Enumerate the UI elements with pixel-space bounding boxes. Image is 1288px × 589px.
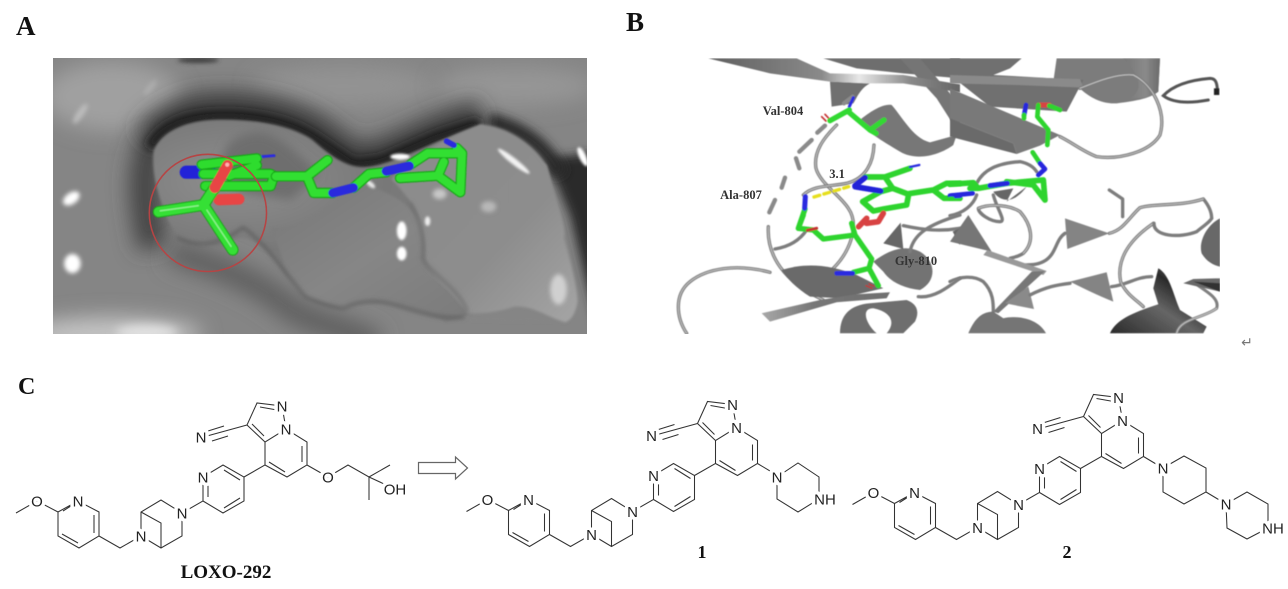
structure: compound 2: N [1158,460,1168,478]
structure: compound 2 [852,390,1284,540]
panel label A: A [16,11,36,41]
red circle highlighting tert-butyl alcohol group [149,154,267,272]
left ribbon section [678,58,960,333]
structure: compound 1: N [772,470,782,486]
structure: compound 1: N [523,492,534,509]
shadow along left wall [145,138,157,248]
compound label 2: 2 [1062,542,1072,562]
structure: compound 2: N [972,520,983,537]
specular highlights [61,79,590,340]
panel A: surface view of binding pocket [53,58,587,334]
mid lobe of surface [306,194,463,314]
structure: LOXO-292: N [281,422,291,438]
structure: compound 1: N [648,468,659,485]
structure: compound 1: NH [814,492,836,508]
hydrogen bond dashes [814,187,849,197]
dark core of ceiling shadow [150,116,481,165]
panel label B: B [626,7,644,37]
surface shading [22,57,602,352]
residue label Ala-807: Ala-807 [720,188,762,202]
arrow: hollow reaction arrow [418,457,468,479]
structure: compound 2: O [868,485,879,502]
right lobe of surface [391,125,578,322]
dashed backbone segments [769,97,853,212]
ligand sticks [159,141,462,250]
structure: LOXO-292: N [177,506,187,522]
distance label 3.1: 3.1 [829,167,845,181]
structure: compound 1: N [627,504,638,521]
structure: compound 2: NH [1262,520,1284,538]
structure: compound 1: N [731,420,742,437]
compound name LOXO-292: LOXO-292 [181,562,271,583]
crevice shadow lines [178,203,467,318]
structure: compound 2: N [1034,461,1045,478]
structure: compound 2: N [1117,413,1128,430]
structure: LOXO-292: OH [384,482,406,498]
panel B: ribbon view of ligand in kinase [678,58,1220,333]
structure: compound 1: N [727,397,738,414]
lower slope shading [171,252,378,345]
return mark glyph: ↵ [1241,335,1253,351]
structure: compound 2: N [1221,496,1231,514]
structure: compound 2: N [1113,390,1124,407]
right ribbon section [950,58,1220,333]
compound label 1: 1 [698,542,706,562]
inner ridge of pocket [222,132,312,200]
pocket interior [152,118,550,260]
structure: compound 2: N [909,485,920,502]
right ligand sticks [950,105,1060,200]
structure: compound 1: N [646,428,657,445]
broad shadow under ceiling [147,106,481,157]
structure: LOXO-292: O [31,494,43,510]
panel label C: C [18,374,35,400]
shadow to the right of the pocket [548,146,587,314]
residue label Val-804: Val-804 [763,104,804,118]
structure: compound 1: O [482,492,493,509]
structure: LOXO-292: N [136,528,146,546]
structure: compound 1: N [586,527,597,544]
left ligand sticks [798,98,960,288]
structure: LOXO-292: N [198,470,208,486]
residue label Gly-810: Gly-810 [895,254,937,268]
structure: compound 2: N [1013,497,1024,514]
structure: LOXO-292: O [322,470,334,486]
structure: compound 2: N [1032,421,1043,438]
structure: LOXO-292 [16,398,406,548]
structure: LOXO-292: N [196,430,206,446]
structure: LOXO-292: N [73,494,83,510]
structure: compound 1 [466,397,836,546]
structure: LOXO-292: N [277,398,287,416]
